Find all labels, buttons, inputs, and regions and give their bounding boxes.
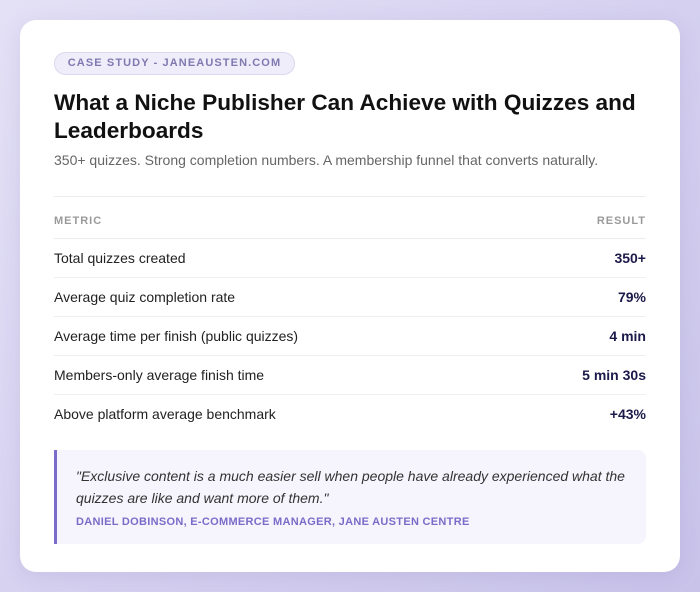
row: total quizzes: Total quizzes created (54, 250, 186, 266)
row: time per finish: 4 min (609, 328, 646, 344)
row: members-only time: 5 min 30s (582, 367, 646, 383)
row: members-only time: Members-only average finish time (54, 367, 264, 383)
row: benchmark (54, 406, 646, 422)
tag pill (54, 52, 295, 75)
table header result: RESULT (597, 215, 646, 227)
row: total quizzes: 350+ (614, 250, 646, 266)
row: completion rate (54, 278, 646, 317)
quote text: "Exclusive content is a much easier sell when people have already experienced what the quizzes are like and want more of them." (76, 468, 625, 506)
subtitle: 350+ quizzes. Strong completion numbers. A membership funnel that converts naturally. (54, 152, 598, 168)
quote callout (54, 450, 646, 544)
row: total quizzes (54, 239, 646, 278)
table header metric: METRIC (54, 215, 102, 227)
row: time per finish: Average time per finish (public quizzes) (54, 328, 298, 344)
row: time per finish (54, 317, 646, 356)
row: completion rate: Average quiz completion rate (54, 289, 235, 305)
quote attribution: DANIEL DOBINSON, E-COMMERCE MANAGER, JANE AUSTEN CENTRE (76, 516, 470, 528)
row: benchmark: +43% (610, 406, 646, 422)
tag pill: CASE STUDY - JANEAUSTEN.COM (68, 57, 281, 69)
row: members-only time (54, 356, 646, 395)
row: benchmark: Above platform average benchmark (54, 406, 276, 422)
title: What a Niche Publisher Can Achieve with Quizzes and Leaderboards (54, 90, 636, 143)
row: completion rate: 79% (618, 289, 646, 305)
